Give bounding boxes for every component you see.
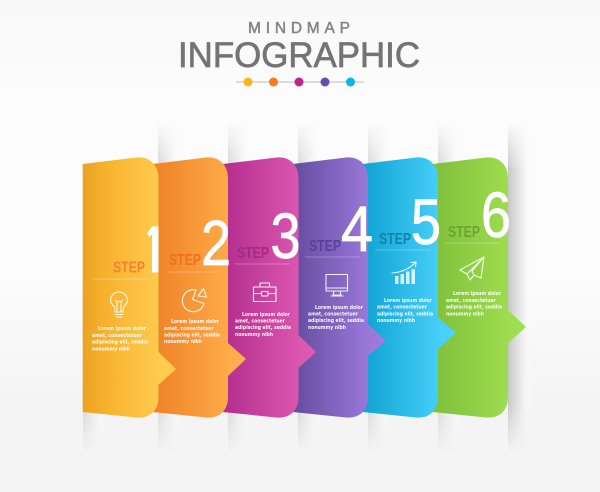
title: INFOGRAPHIC <box>178 35 420 75</box>
icon: pie chart <box>182 288 206 312</box>
text block 2: adipiscing elit, seddia <box>164 332 220 338</box>
number 5: 5 <box>411 186 441 258</box>
text block 1: Lorem ipsum dolor <box>98 326 146 332</box>
icon: light bulb <box>110 292 128 317</box>
text block 4 <box>308 305 364 331</box>
text block 5 <box>377 298 433 324</box>
text block 5: amet, consectetuer <box>377 304 427 310</box>
number 6: 6 <box>481 179 511 251</box>
text block 4: adipiscing elit, seddia <box>308 318 364 324</box>
icon: growth chart <box>392 262 416 284</box>
text block 3: amet, consectetuer <box>235 318 285 324</box>
panel: step 2 <box>153 157 246 418</box>
text block 3: Lorem ipsum dolor <box>242 312 290 318</box>
step label 3: STEP <box>237 245 269 262</box>
panel: step 4 <box>293 157 386 418</box>
step label 1: STEP <box>113 260 145 276</box>
panel: step 6 <box>433 157 526 418</box>
subtitle: MINDMAP <box>248 20 350 37</box>
panel: step 1 <box>83 157 176 418</box>
step label 6: STEP <box>448 224 480 241</box>
text block 3 <box>235 312 291 338</box>
dotted timeline <box>236 78 364 86</box>
icon: paper plane <box>460 257 484 280</box>
text block 2 <box>164 319 220 345</box>
number 3: 3 <box>270 200 300 272</box>
text block 1 <box>92 326 148 352</box>
step label 5: STEP <box>379 231 411 248</box>
text block 4: Lorem ipsum dolor <box>315 305 363 311</box>
number 2: 2 <box>201 207 231 279</box>
bottom column shadows <box>83 412 448 438</box>
text block 6: adipiscing elit, seddia <box>446 304 502 310</box>
text block 4: nonummy nibh <box>308 325 346 331</box>
text block 5: Lorem ipsum dolor <box>384 298 432 304</box>
text block 3: adipiscing elit, seddia <box>235 325 291 331</box>
text block 2: Lorem ipsum dolor <box>171 319 219 325</box>
text block 1: amet, consectetuer <box>92 333 142 339</box>
text block 4: amet, consectetuer <box>308 312 358 318</box>
step label 4: STEP <box>309 238 341 255</box>
panel: step 5 <box>363 157 456 418</box>
right edge shadow <box>508 130 524 443</box>
text block 6: nonummy nibh <box>446 312 484 318</box>
panel: step 3 <box>223 157 316 418</box>
text block 1: adipiscing elit, seddia <box>92 340 148 346</box>
text block 1: nonummy nibh <box>92 346 130 352</box>
text block 6: Lorem ipsum dolor <box>453 291 501 297</box>
step label 2: STEP <box>169 252 201 269</box>
icon: monitor <box>326 274 348 296</box>
number 1 <box>147 226 158 272</box>
text block 2: nonummy nibh <box>164 339 202 345</box>
text block 6: amet, consectetuer <box>446 298 496 304</box>
text block 3: nonummy nibh <box>235 332 273 338</box>
top column shadows <box>158 132 452 164</box>
text block 6 <box>446 291 502 318</box>
number 4: 4 <box>341 193 373 265</box>
text block 5: adipiscing elit, seddia <box>377 312 433 318</box>
text block 5: nonummy nibh <box>377 318 415 324</box>
icon: briefcase <box>254 283 276 302</box>
text block 2: amet, consectetuer <box>164 326 214 332</box>
